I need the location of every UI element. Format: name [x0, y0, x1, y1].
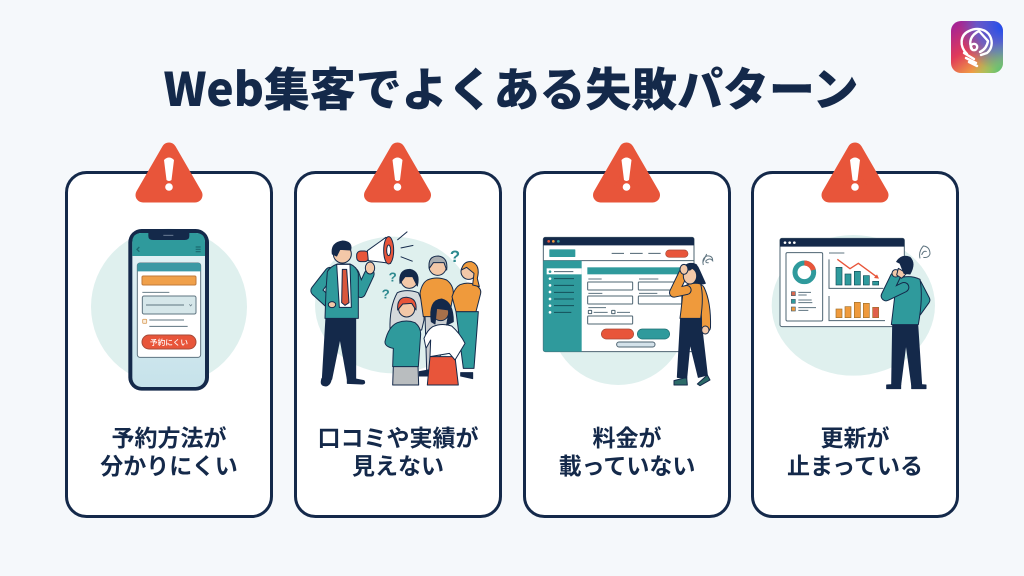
title: Web集客でよくある失敗パターン	[164, 54, 858, 120]
card 4 label: 止まっている	[787, 453, 923, 479]
card 2 label: 口コミや実績が	[318, 425, 478, 451]
left arm to chin	[886, 277, 904, 296]
illustration: smartphone form	[91, 229, 247, 391]
card frame	[524, 172, 730, 516]
illustration: man with megaphone and crowd: ?	[382, 287, 390, 302]
man torso	[325, 264, 358, 318]
card 4 label: 更新が	[820, 425, 890, 451]
illustration: dashboard and thinking man	[772, 235, 935, 389]
megaphone	[357, 251, 369, 262]
card 1 label: 分かりにくい	[100, 453, 238, 479]
card 3 label: 載っていない	[559, 453, 695, 479]
icon: warning triangle	[829, 150, 881, 195]
grey man	[425, 315, 450, 370]
back woman	[390, 291, 424, 330]
illustration: man with megaphone and crowd: ?	[450, 247, 460, 266]
man	[886, 256, 926, 389]
woman	[674, 263, 710, 386]
icon: warning triangle	[372, 150, 424, 195]
panel: card 3 pricing	[524, 150, 730, 516]
man arms	[316, 273, 331, 304]
panel: card 4 updates	[752, 150, 958, 516]
card frame	[66, 172, 272, 516]
front woman	[427, 357, 458, 385]
card 1 label: 予約方法が	[112, 425, 226, 451]
card frame	[296, 172, 500, 516]
card 2 label: 見えない	[352, 453, 444, 479]
panel: card 1 reservation	[66, 150, 272, 516]
long hair behind	[683, 263, 705, 285]
illustration: smartphone form: 予約にくい	[150, 337, 188, 347]
illustration: web form and confused woman	[543, 237, 713, 386]
right arm	[700, 289, 706, 327]
torso	[891, 277, 921, 325]
card frame	[752, 172, 958, 516]
raised arm	[674, 273, 687, 293]
torso	[680, 283, 702, 318]
illustration: man with megaphone and crowd	[315, 232, 481, 386]
illustration: man with megaphone and crowd: ?	[389, 269, 397, 284]
right arm on hip	[917, 284, 925, 312]
man legs	[322, 308, 356, 379]
card 3 label: 料金が	[592, 425, 662, 451]
front boy	[393, 366, 419, 385]
icon: warning triangle	[143, 150, 195, 195]
logo icon	[951, 21, 1003, 73]
panel: card 2 reviews	[296, 150, 500, 516]
icon: warning triangle	[600, 150, 652, 195]
orange woman	[456, 312, 478, 368]
